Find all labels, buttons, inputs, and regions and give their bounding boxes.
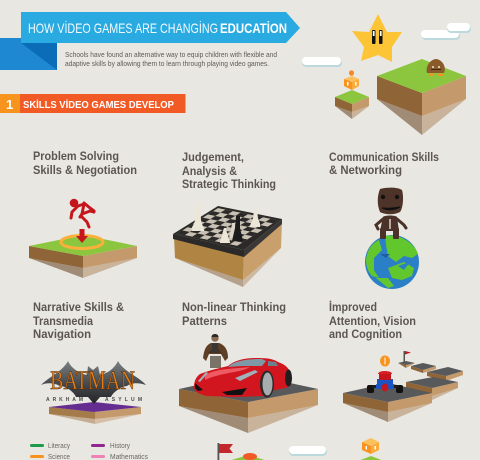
heading: communication: & Networking xyxy=(329,163,402,177)
intro text: adaptive skills by allowing them to learn through playing video games. xyxy=(65,61,269,68)
heading: improved attention: and Cognition xyxy=(329,327,402,341)
heading: non-linear: Patterns xyxy=(182,314,227,328)
heading: narrative: Narrative Skills & xyxy=(33,300,124,314)
icon: chessboard xyxy=(173,204,282,287)
title ribbon xyxy=(0,12,300,70)
title ribbon: HOW VİDEO GAMES ARE CHANGİNG xyxy=(28,19,218,36)
icon: large floating island with goomba xyxy=(377,59,466,135)
legend: History xyxy=(110,443,130,450)
section banner: 1 xyxy=(6,97,13,112)
icon: batman logo on purple island: BATMAN xyxy=(50,366,135,395)
legend xyxy=(30,443,148,460)
icon: kart on stepping platforms xyxy=(343,351,463,422)
icon: portal island xyxy=(29,199,137,278)
heading: improved attention: Attention, Vision xyxy=(329,314,416,328)
section banner: SKİLLS VİDEO GAMES DEVELOP xyxy=(23,98,174,111)
intro text: Schools have found an alternative way to equip children with flexible and xyxy=(65,52,277,59)
icon: batman logo on purple island: ASYLUM xyxy=(105,397,142,403)
heading: narrative: Navigation xyxy=(33,327,91,341)
icon: small floating island with question block xyxy=(335,70,369,119)
heading: problem solving: Skills & Negotiation xyxy=(33,163,137,177)
clouds xyxy=(289,23,471,456)
icon: batman logo on purple island: ARKHAM xyxy=(46,397,83,403)
icon: batman logo on purple island xyxy=(41,361,146,424)
section banner xyxy=(0,94,186,113)
heading: judgement: Analysis & xyxy=(182,164,237,178)
heading: improved attention: İmproved xyxy=(329,299,377,314)
heading: communication: Communication Skills xyxy=(329,150,439,164)
icon: red car and character on island xyxy=(179,334,318,433)
icon: question block at bottom xyxy=(358,438,384,460)
heading: judgement: Judgement, xyxy=(182,150,244,164)
intro text xyxy=(65,52,277,68)
legend: Literacy xyxy=(48,443,70,450)
icon: star xyxy=(352,14,402,62)
heading: judgement: Strategic Thinking xyxy=(182,177,276,191)
heading: narrative: Transmedia xyxy=(33,314,93,328)
icon: flag and island at bottom xyxy=(209,443,288,460)
icon: sackboy on globe xyxy=(365,188,419,289)
title ribbon: EDUCATİON xyxy=(220,20,287,36)
heading: non-linear: Non-linear Thinking xyxy=(182,300,286,314)
heading: problem solving: Problem Solving xyxy=(33,149,119,163)
